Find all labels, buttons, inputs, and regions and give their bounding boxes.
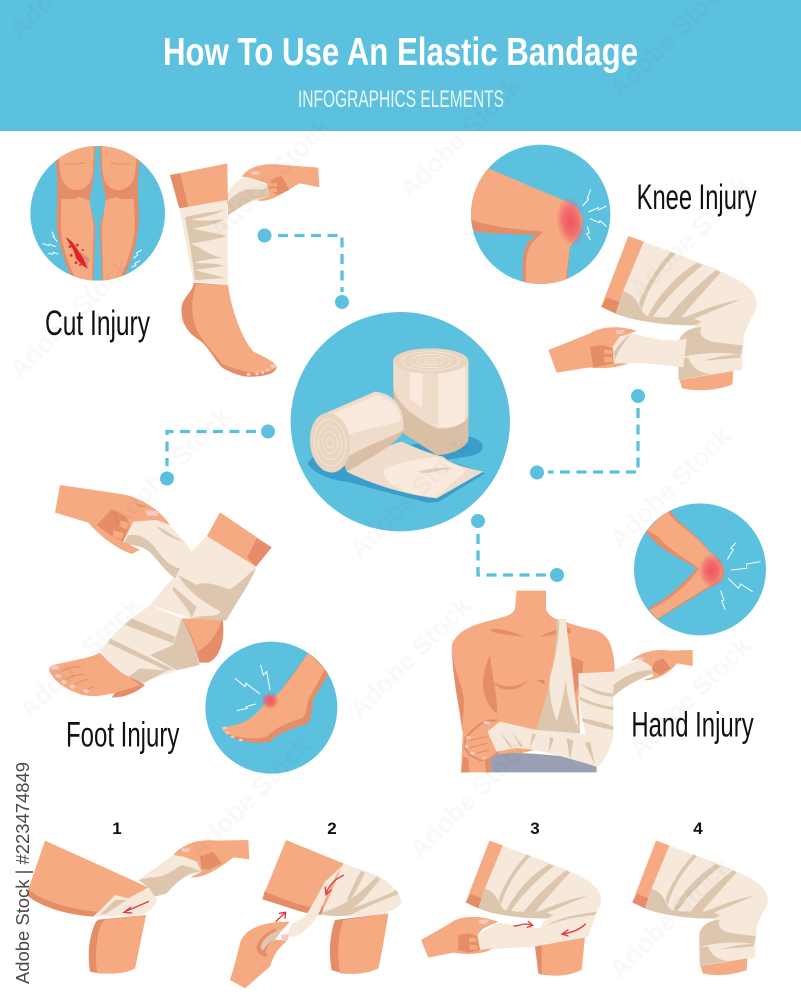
watermark overlay: Adobe Stock: [103, 400, 237, 534]
stock id vertical text: Adobe Stock | #223474849: [13, 762, 33, 984]
roll shadows: [307, 436, 485, 503]
watermark overlay: Adobe Stock: [603, 420, 737, 554]
step numbers: 2: [327, 819, 337, 838]
step numbers: 1: [112, 819, 122, 838]
label: Foot Injury: Foot Injury: [66, 716, 180, 755]
icon: injured shins circle: [30, 143, 165, 283]
icon: elbow pain circle: [634, 503, 766, 635]
watermark overlay: Adobe Stock: [343, 430, 477, 564]
illustration: bandaged ankle with hand: [49, 485, 272, 697]
watermark overlay: Adobe Stock: [603, 850, 737, 984]
hand wrapping knee bandage: [548, 327, 687, 373]
watermark overlay: Adobe Stock: [343, 590, 477, 724]
watermark overlay: Adobe Stock: [623, 630, 757, 764]
connector: knee injury: [530, 389, 645, 480]
steps: knee bandaging sequence: [27, 819, 768, 988]
title: How To Use An Elastic Bandage: [163, 31, 638, 74]
panel: foot injury: [49, 485, 337, 774]
unrolled bandage strip: [347, 442, 483, 498]
watermark overlay: Adobe Stock: [13, 590, 147, 724]
watermark overlay: Adobe Stock: [183, 730, 317, 864]
panel: knee injury: [467, 145, 757, 287]
watermark overlay: Adobe Stock: [403, 730, 537, 864]
icon: knee pain circle: [467, 145, 610, 287]
connector: foot injury: [160, 424, 275, 486]
watermark overlay: Adobe Stock: [203, 110, 337, 244]
panel: hand injury: [452, 503, 766, 772]
step numbers: [112, 819, 703, 838]
header banner: [0, 0, 801, 131]
wound: [66, 237, 89, 269]
step 2: [230, 840, 402, 988]
step 1: [27, 840, 249, 974]
step 3: [421, 841, 601, 976]
panel: cut injury: [30, 143, 319, 377]
illustration: bandaged knee with hand: [601, 236, 757, 390]
central bandage rolls: [291, 312, 510, 531]
icon: ankle pain circle: [205, 642, 337, 774]
connector: hand injury: [471, 514, 564, 582]
watermark overlay: Adobe Stock: [623, 170, 757, 304]
step numbers: 4: [693, 819, 703, 838]
lying bandage roll: [307, 392, 403, 475]
label: Cut Injury: Cut Injury: [45, 304, 150, 343]
connector: cut injury: [258, 228, 349, 309]
bandaged arm: [487, 672, 613, 767]
bandage strip and right hand: [613, 660, 653, 697]
illustration: torso with arm sling: [452, 591, 693, 772]
trousers: [491, 753, 597, 772]
step numbers: 3: [530, 819, 540, 838]
illustration: bandaged lower leg: [170, 163, 319, 377]
left hand: [463, 719, 502, 761]
sling: [536, 619, 580, 735]
subtitle: INFOGRAPHICS ELEMENTS: [298, 86, 504, 113]
watermark overlay: Adobe Stock: [393, 70, 527, 204]
step 4: [632, 841, 768, 975]
upright bandage roll: [393, 348, 468, 455]
watermark overlay: Adobe Stock: [3, 250, 137, 384]
